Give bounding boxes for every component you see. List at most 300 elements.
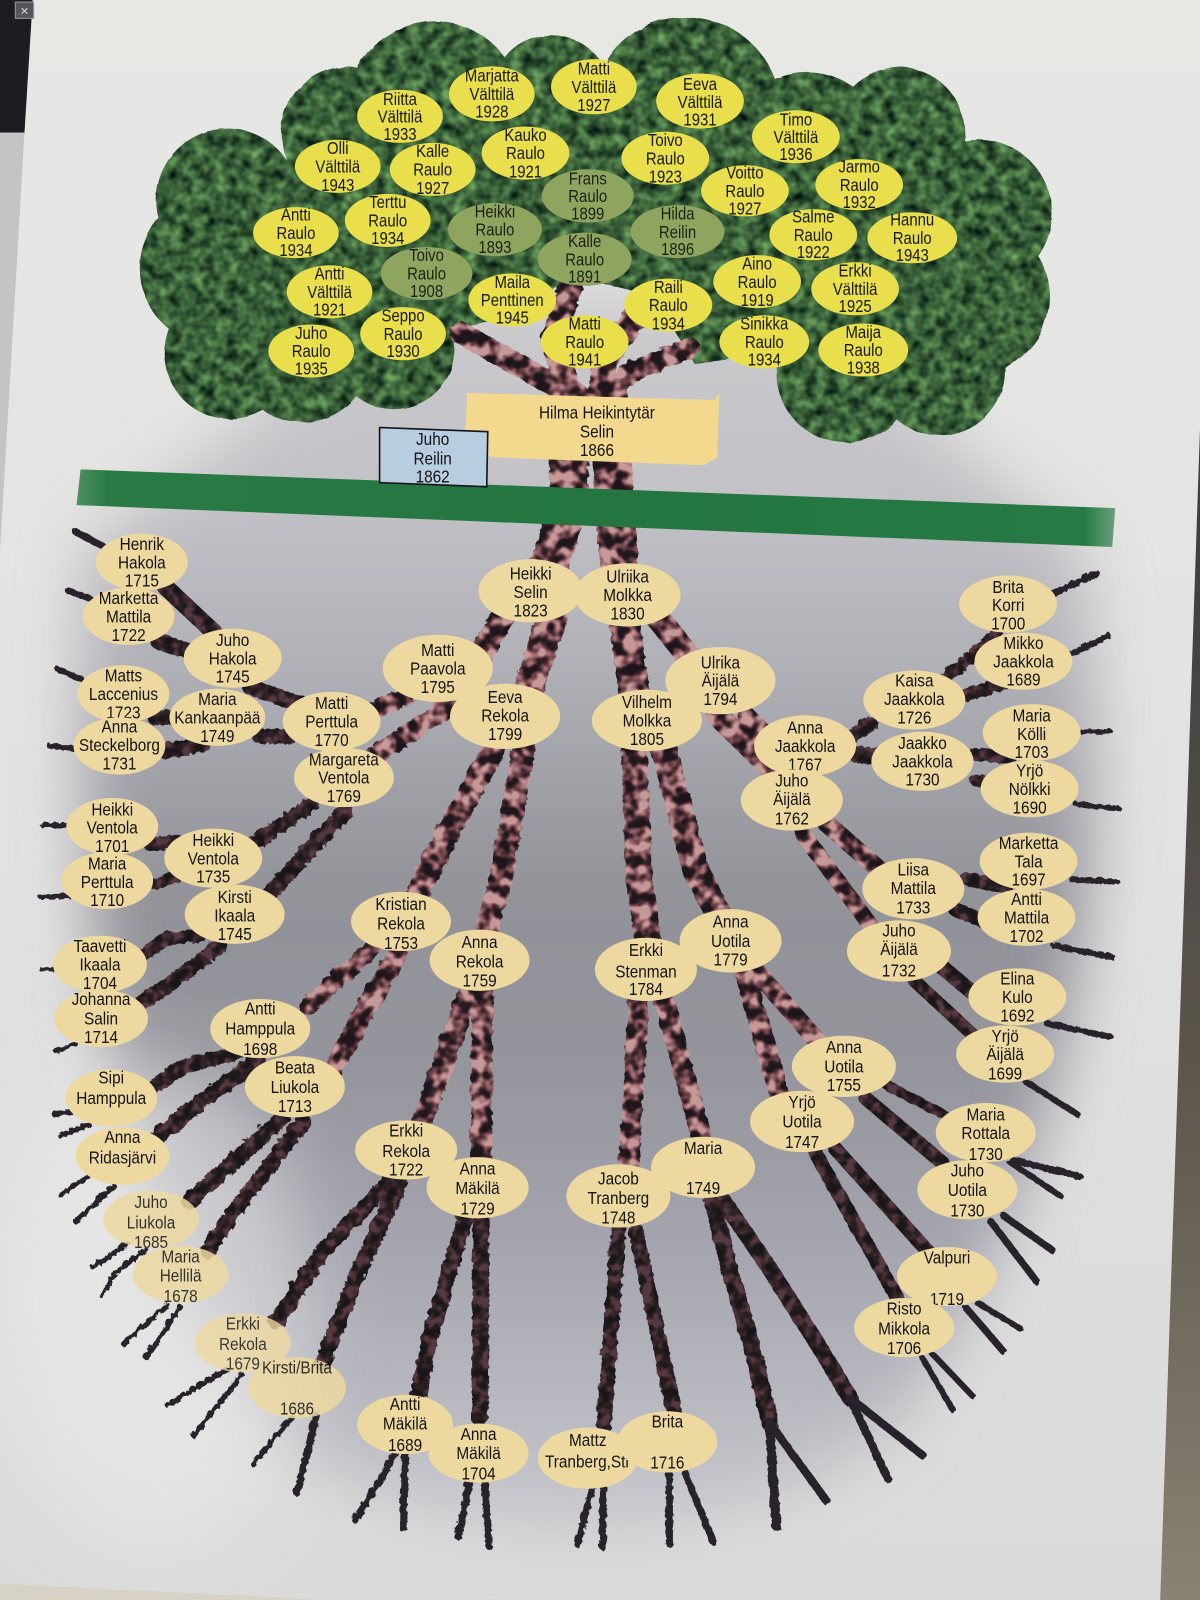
node: Jarmo Raulo 1932: Jarmo	[838, 157, 880, 177]
node: Hilda Reilin 1896: Hilda	[661, 204, 695, 224]
node: Toivo Raulo 1923	[621, 131, 709, 187]
node: Erkki Stenman 1784: 1784	[629, 979, 663, 999]
node: Kalle Raulo 1927: Raulo	[413, 160, 452, 180]
node: Erkki Stenman 1784	[595, 938, 697, 1001]
node: Brita Korri 1700: 1700	[991, 614, 1025, 634]
node: Anna Rekola 1759: 1759	[463, 971, 497, 991]
node: Erkki Rekola 1679: Rekola	[219, 1334, 267, 1354]
node: Antti Välttilä 1921: Antti	[315, 265, 345, 284]
node: Liisa Mattila 1733: Liisa	[897, 859, 930, 880]
node: Erkki Välttilä 1925: 1925	[839, 297, 872, 317]
node: Juho Liukola 1685: 1685	[134, 1232, 168, 1252]
node: Brita 1716: Brita	[652, 1411, 684, 1432]
node: Erkki Rekola 1722	[355, 1120, 457, 1180]
node: Heikki Ventola 1735: Heikki	[192, 830, 234, 850]
node: Juho Hakola 1745	[184, 629, 282, 688]
node: Voitto Raulo 1927	[701, 164, 789, 219]
node: Maria 1749	[651, 1137, 755, 1198]
node: Mikko Jaakkola 1689	[974, 633, 1072, 690]
node: Maria Kölli 1703: Maria	[1012, 705, 1051, 726]
node: Terttu Raulo 1934: 1934	[371, 229, 404, 248]
node: Beata Liukola 1713: Beata	[275, 1057, 316, 1078]
node: Juho Liukola 1685	[103, 1191, 199, 1252]
node: Matti Perttula 1770: Matti	[315, 693, 348, 713]
node: Hilda Reilin 1896: Reilin	[659, 223, 696, 242]
node: Elina Kulo 1692: 1692	[1000, 1005, 1034, 1026]
node: Maija Raulo 1938: Maija	[845, 323, 881, 342]
node: Yrjö Uotila 1747: Uotila	[782, 1111, 822, 1132]
node: Maria Rottala 1730	[936, 1103, 1036, 1164]
node: Juho Hakola 1745: Juho	[216, 630, 249, 650]
node: Maila Penttinen 1945: Maila	[494, 273, 530, 292]
node: Yrjö Nölkki 1690: Yrjö	[1016, 760, 1043, 781]
node: Erkki Välttilä 1925: Välttilä	[833, 280, 877, 299]
node: Jacob Tranberg 1748: Jacob	[598, 1169, 639, 1189]
node: Matti Perttula 1770: 1770	[315, 730, 349, 750]
node: Timo Välttilä 1936: Välttilä	[774, 128, 818, 147]
node: Salme Raulo 1922: Raulo	[794, 226, 833, 245]
node: Marketta Mattila 1722: Mattila	[106, 606, 152, 627]
node: Kalle Raulo 1927: Kalle	[416, 142, 449, 161]
node: Antti Välttilä 1921: 1921	[313, 300, 346, 320]
node: Margareta Ventola 1769: Ventola	[318, 768, 370, 788]
node: Kauko Raulo 1921: Kauko	[504, 126, 547, 145]
node: Sinikka Raulo 1934: Sinikka	[740, 315, 788, 334]
node: Marketta Mattila 1722: 1722	[111, 625, 146, 645]
node: Frans Raulo 1899: Raulo	[568, 187, 607, 206]
node: Ulrika Äijälä 1794: Äijälä	[702, 671, 740, 691]
node: Valpuri 1719: Valpuri	[924, 1247, 970, 1268]
node: Jarmo Raulo 1932	[815, 157, 903, 212]
node: Maria Hellilä 1678: Maria	[161, 1246, 200, 1267]
node: Margareta Ventola 1769	[294, 748, 394, 807]
node: Kaisa Jaakkola 1726: Jaakkola	[884, 689, 945, 709]
node: Margareta Ventola 1769: 1769	[327, 786, 361, 806]
node: Riitta Välttilä 1933: Välttilä	[378, 107, 422, 127]
node: Kaisa Jaakkola 1726: Kaisa	[895, 671, 934, 691]
node: Taavetti Ikaala 1704: Ikaala	[80, 954, 121, 975]
node: Juho Äijälä 1762: Äijälä	[773, 789, 811, 809]
node: Ulriika Molkka 1830	[574, 563, 681, 627]
node: Sipi Hamppula	[65, 1068, 157, 1127]
green ground band	[77, 469, 1115, 547]
node: Matti Perttula 1770	[283, 692, 381, 751]
node: Raili Raulo 1934: Raili	[654, 278, 683, 297]
node: Yrjö Äijälä 1699: Äijälä	[986, 1044, 1025, 1064]
node: Antti Välttilä 1921: Välttilä	[307, 283, 352, 302]
node: Elina Kulo 1692: Kulo	[1002, 987, 1033, 1007]
node: Eeva Välttilä 1931: Välttilä	[678, 93, 722, 112]
node: Hannu Raulo 1943	[867, 210, 957, 266]
node: Antti Raulo 1934: Raulo	[276, 224, 315, 243]
node: Kalle Raulo 1927: 1927	[416, 179, 449, 198]
node: Timo Välttilä 1936: 1936	[779, 145, 812, 164]
node: Anna Mäkilä 1729	[427, 1157, 529, 1219]
node: Raili Raulo 1934	[624, 278, 712, 334]
node: Juho Uotila 1730: Juho	[951, 1160, 984, 1181]
node: Anna Mäkilä 1704: Mäkilä	[456, 1443, 501, 1463]
node: Marketta Mattila 1722: Marketta	[99, 588, 159, 608]
node: Matti Raulo 1941: Raulo	[565, 333, 604, 352]
node: Brita Korri 1700: Brita	[992, 577, 1025, 597]
node: Kalle Raulo 1891: Raulo	[565, 250, 604, 270]
node: Toivo Raulo 1923: Raulo	[646, 149, 685, 169]
node: Vilhelm Molkka 1805: 1805	[630, 729, 664, 749]
node: Olli Välttilä 1943	[295, 139, 381, 195]
node: Anna Jaakkola 1767: Anna	[787, 718, 824, 738]
node: Yrjö Nölkki 1690	[981, 760, 1079, 818]
node: Erkki Stenman 1784: Erkki	[629, 940, 663, 960]
node: Maria Rottala 1730: Rottala	[961, 1123, 1011, 1143]
node: Riitta Välttilä 1933	[357, 90, 443, 144]
node: Ulriika Molkka 1830: Ulriika	[606, 567, 650, 587]
node: Anna Mäkilä 1704	[429, 1423, 529, 1484]
node: Maria Kölli 1703: 1703	[1015, 742, 1049, 762]
node: Matti Paavola 1795	[383, 635, 493, 702]
node: Maria Hellilä 1678: 1678	[164, 1286, 198, 1306]
node: Henrik Hakola 1715: Henrik	[120, 534, 165, 554]
node: Toivo Raulo 1923: Toivo	[648, 131, 683, 150]
node: Antti Mattila 1702: 1702	[1009, 926, 1044, 946]
node: Ulrika Äijälä 1794	[665, 647, 776, 714]
node: Matti Paavola 1795: 1795	[421, 677, 455, 697]
node: Eeva Rekola 1799	[450, 684, 560, 749]
node: Maria Kankaanpää 1749: Maria	[198, 689, 237, 709]
node: Yrjö Nölkki 1690: Nölkki	[1009, 779, 1050, 799]
node: Matti Välttilä 1927: Matti	[578, 59, 610, 79]
node: Erkki Rekola 1679: 1679	[226, 1353, 260, 1374]
node: Anna Steckelborg 1731: Steckelborg	[79, 735, 160, 755]
node: Anna Mäkilä 1704: Anna	[461, 1424, 497, 1444]
node: Margareta Ventola 1769: Margareta	[309, 749, 380, 770]
node: Anna Uotila 1755	[792, 1036, 896, 1097]
node: Juho Äijälä 1732: 1732	[882, 960, 916, 981]
node: Marketta Tala 1697: Tala	[1014, 851, 1043, 872]
node: Maria Hellilä 1678: Hellilä	[160, 1266, 202, 1286]
node: Juho Raulo 1935: Juho	[295, 324, 327, 343]
node: Antti Mattila 1702: Mattila	[1004, 907, 1050, 928]
node: Kalle Raulo 1927	[390, 142, 476, 198]
node: Terttu Raulo 1934	[345, 193, 431, 248]
node: Henrik Hakola 1715: 1715	[125, 571, 159, 591]
node: Anna Uotila 1779: Uotila	[711, 931, 751, 951]
node: Matti Raulo 1941	[541, 315, 629, 370]
name plate: Hilma Heikintytär Selin 1866: Hilma Heikintytär	[539, 402, 655, 423]
node: Raili Raulo 1934: 1934	[652, 315, 685, 334]
node: Toivo Raulo 1923: 1923	[649, 168, 682, 187]
node: Matti Paavola 1795: Matti	[421, 640, 454, 660]
node: Mikko Jaakkola 1689: Jaakkola	[993, 651, 1054, 672]
node: Salme Raulo 1922: Salme	[792, 207, 834, 227]
node: Maria Kankaanpää 1749: 1749	[200, 726, 234, 746]
node: Ulrika Äijälä 1794: Ulrika	[701, 652, 741, 673]
node: Maria Kölli 1703: Kölli	[1017, 724, 1046, 744]
node: Antti Mäkilä 1689: Mäkilä	[383, 1414, 428, 1434]
node: Hannu Raulo 1943: Hannu	[890, 210, 934, 230]
node: Sinikka Raulo 1934: 1934	[748, 350, 781, 370]
node: Anna Uotila 1779: 1779	[714, 949, 748, 970]
node: Anna Rekola 1759: Anna	[462, 932, 498, 952]
node: Toivo Raulo 1908: Toivo	[409, 246, 444, 266]
node: Kalle Raulo 1891: Kalle	[568, 232, 601, 251]
node: Beata Liukola 1713: 1713	[278, 1096, 312, 1117]
node: Heikki Raulo 1893	[448, 202, 542, 257]
node: Erkki Välttilä 1925	[811, 262, 899, 317]
node: Anna Mäkilä 1704: 1704	[461, 1464, 496, 1484]
node: Maila Penttinen 1945	[468, 273, 556, 328]
name plate: Hilma Heikintytär Selin 1866: Selin	[580, 422, 614, 442]
node: Liisa Mattila 1733	[862, 858, 964, 919]
canopy nodes	[253, 59, 957, 379]
dark backdrop strip on the right edge	[1160, 429, 1200, 1600]
node: Juho Uotila 1730	[917, 1160, 1017, 1221]
node: Matts Laccenius 1723: Laccenius	[89, 684, 158, 704]
node: Antti Mäkilä 1689: 1689	[388, 1435, 422, 1455]
node: Heikki Selin 1823	[479, 559, 583, 622]
node: Johanna Salin 1714	[54, 989, 148, 1047]
node: Antti Raulo 1934: Antti	[281, 205, 311, 225]
node: Marjatta Välttilä 1928	[449, 66, 535, 122]
node: Johanna Salin 1714: Salin	[84, 1008, 118, 1029]
node: Brita Korri 1700: Korri	[992, 595, 1024, 616]
node: Seppo Raulo 1930: Raulo	[384, 325, 423, 344]
node: Frans Raulo 1899: 1899	[571, 204, 604, 224]
node: Heikki Raulo 1893: 1893	[478, 238, 511, 257]
node: Voitto Raulo 1927: Raulo	[725, 182, 764, 201]
node: Matts Laccenius 1723: Matts	[105, 666, 142, 686]
tree trunk and branches	[459, 286, 689, 577]
node: Kirsti Ikaala 1745: Ikaala	[214, 905, 256, 926]
node: Maria Kankaanpää 1749	[169, 689, 265, 746]
node: Maria Kankaanpää 1749: Kankaanpää	[174, 707, 261, 728]
node: Ulrika Äijälä 1794: 1794	[703, 689, 737, 709]
node: Kristian Rekola 1753	[351, 892, 451, 953]
node: Risto Mikkola 1706	[854, 1298, 954, 1358]
node: Kristian Rekola 1753: Kristian	[375, 894, 427, 914]
node: Anna Ridasjärvi: Anna	[105, 1127, 141, 1147]
node: Aino Raulo 1919: Raulo	[738, 273, 777, 292]
node: Yrjö Äijälä 1699: 1699	[988, 1064, 1022, 1084]
node: Heikki Raulo 1893: Raulo	[475, 221, 514, 240]
node: Jacob Tranberg 1748	[566, 1164, 670, 1228]
node: Antti Hamppula 1698: Hamppula	[225, 1019, 296, 1039]
node: Erkki Välttilä 1925: Erkki	[839, 262, 872, 281]
tree canopy	[139, 16, 1051, 442]
node: Risto Mikkola 1706: Risto	[887, 1298, 922, 1319]
node: Matti Välttilä 1927: Välttilä	[572, 78, 616, 97]
node: Anna Mäkilä 1729: Anna	[460, 1158, 496, 1179]
node: Aino Raulo 1919: Aino	[742, 254, 772, 274]
node: Antti Raulo 1934: 1934	[279, 241, 312, 260]
node: Kirsti Ikaala 1745: Kirsti	[218, 887, 252, 907]
node: Matti Raulo 1941: Matti	[569, 315, 601, 334]
node: Marjatta Välttilä 1928: 1928	[475, 102, 508, 122]
node: Johanna Salin 1714: Johanna	[72, 989, 131, 1009]
node: Matti Perttula 1770: Perttula	[305, 711, 359, 732]
node: Kauko Raulo 1921: Raulo	[506, 144, 545, 163]
node: Erkki Rekola 1722: Erkki	[389, 1121, 423, 1141]
node: Henrik Hakola 1715	[96, 534, 188, 591]
node: Hilda Reilin 1896: 1896	[661, 240, 694, 259]
node: Vilhelm Molkka 1805	[592, 690, 702, 751]
node: Salme Raulo 1922	[769, 207, 857, 262]
node: Mikko Jaakkola 1689: Mikko	[1003, 633, 1044, 653]
node: Jaakko Jaakkola 1730	[871, 732, 973, 791]
node: Voitto Raulo 1927: Voitto	[726, 164, 764, 183]
node: Matti Paavola 1795: Paavola	[410, 658, 466, 679]
node: Heikki Ventola 1701: Ventola	[87, 818, 139, 838]
node: Hilda Reilin 1896	[631, 204, 724, 259]
node: Heikki Ventola 1701: Heikki	[91, 799, 133, 820]
node: Risto Mikkola 1706: 1706	[887, 1338, 921, 1358]
node: Antti Hamppula 1698: 1698	[243, 1039, 277, 1059]
node: Juho Liukola 1685: Liukola	[127, 1212, 176, 1233]
node: Sipi Hamppula: Hamppula	[76, 1088, 147, 1108]
node: Kirsti Ikaala 1745	[185, 885, 285, 944]
node: Heikki Raulo 1893: Heikki	[475, 202, 515, 222]
name plate: Juho Reilin 1862: Juho	[416, 429, 449, 449]
node: Aino Raulo 1919: 1919	[741, 291, 774, 310]
node: Vilhelm Molkka 1805: Vilhelm	[622, 692, 672, 712]
node: Anna Steckelborg 1731: Anna	[101, 717, 138, 737]
node: Kirsti Ikaala 1745: 1745	[218, 924, 252, 944]
node: Johanna Salin 1714: 1714	[84, 1027, 118, 1047]
node: Kirsti/Brita 1686: 1686	[280, 1398, 314, 1419]
node: Brita 1716	[617, 1411, 717, 1473]
node: Toivo Raulo 1908: Raulo	[407, 265, 446, 284]
node: Marjatta Välttilä 1928: Marjatta	[465, 67, 519, 86]
node: Kauko Raulo 1921	[482, 126, 569, 182]
node: Matti Välttilä 1927	[551, 59, 637, 116]
node: Matts Laccenius 1723	[78, 665, 169, 723]
node: Anna Rekola 1759: Rekola	[456, 951, 504, 972]
node: Olli Välttilä 1943: 1943	[321, 176, 354, 195]
node: Anna Uotila 1779: Anna	[713, 911, 749, 932]
node: Anna Uotila 1755: Anna	[826, 1037, 862, 1057]
node: Anna Uotila 1755: 1755	[827, 1075, 861, 1095]
node: Jarmo Raulo 1932: Raulo	[840, 176, 879, 195]
node: Maria Rottala 1730: Maria	[967, 1104, 1006, 1125]
node: Eeva Rekola 1799: Eeva	[488, 687, 523, 707]
node: Juho Äijälä 1762: 1762	[775, 808, 809, 829]
node: Seppo Raulo 1930	[360, 306, 446, 361]
node: Antti Mattila 1702: Antti	[1011, 889, 1042, 909]
node: Taavetti Ikaala 1704: Taavetti	[74, 936, 126, 956]
node: Anna Steckelborg 1731: 1731	[102, 753, 136, 774]
node: Salme Raulo 1922: 1922	[797, 243, 830, 262]
node: Yrjö Uotila 1747: 1747	[785, 1132, 819, 1152]
node: Juho Äijälä 1762	[741, 769, 843, 831]
node: Maila Penttinen 1945: Penttinen	[481, 291, 544, 310]
node: Maila Penttinen 1945: 1945	[496, 308, 529, 328]
node: Olli Välttilä 1943: Välttilä	[315, 157, 360, 177]
icon: close box	[15, 2, 34, 19]
dark screen corner on the top left	[0, 0, 33, 133]
node: Maija Raulo 1938: 1938	[847, 358, 880, 378]
node: Taavetti Ikaala 1704: 1704	[83, 973, 117, 993]
node: Jacob Tranberg 1748: 1748	[601, 1207, 635, 1228]
node: Elina Kulo 1692	[968, 968, 1066, 1026]
pale strip along the bottom edge	[0, 1584, 327, 1600]
name plate: Hilma Heikintytär Selin 1866	[465, 393, 719, 465]
node: Toivo Raulo 1908	[381, 246, 472, 301]
node: Antti Hamppula 1698	[210, 998, 310, 1059]
node: Marketta Mattila 1722	[83, 588, 174, 645]
grey sliver on the left edge	[0, 133, 24, 551]
node: Heikki Ventola 1701: 1701	[95, 836, 129, 856]
node: Kalle Raulo 1891	[538, 232, 632, 287]
node: Elina Kulo 1692: Elina	[1000, 969, 1035, 989]
node: Aino Raulo 1919	[713, 254, 801, 310]
node: Eeva Välttilä 1931: 1931	[683, 110, 717, 130]
roots: upper bark	[306, 602, 883, 1168]
node: Maria Hellilä 1678	[133, 1246, 229, 1306]
node: Kristian Rekola 1753: 1753	[384, 933, 418, 953]
node: Anna Mäkilä 1729: 1729	[460, 1198, 495, 1219]
node: Antti Mäkilä 1689	[357, 1394, 453, 1455]
node: Juho Uotila 1730: Uotila	[948, 1180, 988, 1200]
node: Mattz Tranberg,Str: Tranberg,Str	[545, 1451, 631, 1472]
node: Kirsti/Brita 1686: Kirsti/Brita	[262, 1357, 333, 1378]
node: Hannu Raulo 1943: 1943	[896, 246, 929, 266]
node: Seppo Raulo 1930: 1930	[386, 342, 420, 361]
node: Marketta Tala 1697: 1697	[1011, 870, 1046, 890]
node: Matts Laccenius 1723: 1723	[106, 702, 141, 723]
node: Timo Välttilä 1936: Timo	[780, 110, 812, 130]
node: Mikko Jaakkola 1689: 1689	[1006, 670, 1041, 690]
node: Kristian Rekola 1753: Rekola	[377, 914, 426, 934]
root nodes	[53, 534, 1081, 1489]
glare on lower left of the backdrop	[0, 1061, 306, 1551]
node: Jacob Tranberg 1748: Tranberg	[588, 1188, 649, 1208]
node: Maija Raulo 1938: Raulo	[844, 341, 883, 360]
node: Juho Hakola 1745: 1745	[216, 667, 250, 687]
node: Sinikka Raulo 1934	[719, 315, 809, 370]
node: Eeva Rekola 1799: Rekola	[481, 705, 530, 726]
node: Terttu Raulo 1934: Terttu	[369, 193, 406, 212]
node: Yrjö Uotila 1747: Yrjö	[788, 1092, 816, 1112]
name plate: Juho Reilin 1862	[380, 428, 488, 487]
node: Henrik Hakola 1715: Hakola	[118, 552, 166, 573]
node: Kaisa Jaakkola 1726	[863, 670, 965, 730]
node: Anna Uotila 1755: Uotila	[824, 1056, 864, 1077]
node: Jarmo Raulo 1932: 1932	[843, 193, 876, 212]
node: Anna Jaakkola 1767: 1767	[788, 754, 822, 775]
node: Erkki Rekola 1722: 1722	[389, 1159, 423, 1180]
node: Heikki Selin 1823: Heikki	[510, 564, 552, 584]
icon: close box: ×	[20, 3, 29, 19]
node: Maria Rottala 1730: 1730	[969, 1144, 1003, 1164]
node: Ulriika Molkka 1830: Molkka	[603, 585, 653, 605]
node: Valpuri 1719: 1719	[930, 1289, 964, 1309]
node: Riitta Välttilä 1933: Riitta	[383, 90, 417, 109]
node: Yrjö Nölkki 1690: 1690	[1013, 797, 1047, 818]
node: Jaakko Jaakkola 1730: Jaakkola	[892, 751, 953, 772]
node: Eeva Välttilä 1931	[656, 73, 744, 130]
node: Marjatta Välttilä 1928: Välttilä	[469, 85, 514, 104]
node: Juho Liukola 1685: Juho	[134, 1192, 168, 1212]
node: Antti Raulo 1934	[253, 205, 339, 260]
node: Anna Ridasjärvi: Ridasjärvi	[89, 1147, 156, 1168]
node: Antti Mattila 1702	[978, 889, 1076, 946]
node: Beata Liukola 1713: Liukola	[271, 1077, 320, 1097]
node: Maija Raulo 1938	[818, 323, 908, 378]
node: Jaakko Jaakkola 1730: 1730	[905, 770, 940, 790]
node: Marketta Tala 1697	[980, 833, 1078, 890]
node: Heikki Ventola 1735: Ventola	[188, 848, 240, 869]
node: Juho Äijälä 1762: Juho	[775, 771, 808, 791]
node: Juho Raulo 1935: 1935	[295, 359, 328, 379]
